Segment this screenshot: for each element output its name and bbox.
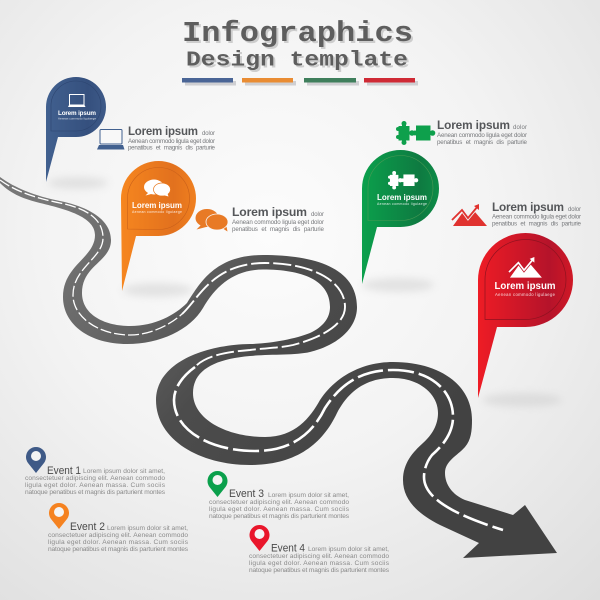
text block 2: dolor [311,212,324,218]
winding road with arrow [0,177,557,558]
event 1: Event 1 [47,465,81,477]
event 4: natoque penatibus et magnis dis parturient montes [249,567,390,574]
event 2: natoque penatibus et magnis dis parturient montes [48,546,189,553]
panel: orange pin: Aenean commodo ligulaege [132,210,182,214]
icon: green location marker [208,471,227,497]
event 1: natoque penatibus et magnis dis parturient montes [25,489,166,496]
panel: blue pin: Aenean commodo ligulaege [58,116,96,120]
icon: puzzle pieces [396,121,435,145]
event 2: Lorem ipsum dolor sit amet, [107,525,188,532]
panel: green pin: Lorem ipsum [377,193,427,202]
event 3 [208,471,350,520]
text block 1: dolor [202,131,215,137]
event 4: Event 4 [271,542,305,554]
text block 2 [232,205,325,233]
text block 4: Lorem ipsum [492,200,564,214]
event 1: consectetuer adipiscing elit. Aenean commodo [25,475,165,482]
event 1 [25,447,166,496]
panel: orange pin: Lorem ipsum [132,201,182,210]
text block 2: Lorem ipsum [232,205,307,219]
title: Infographics [182,17,413,50]
text block 3: Lorem ipsum [437,118,510,132]
event 1: ligula eget dolor. Aenean massa. Cum sociis [25,482,166,489]
panel: red pin: Aenean commodo ligulaege [495,292,556,297]
text block 3 [437,118,528,146]
event 1: Lorem ipsum dolor sit amet, [83,468,165,475]
panel: red pin [478,233,573,407]
event 4 [249,525,390,574]
text block 4: Aenean commodo ligula eget dolor [492,214,581,220]
panel: blue pin [46,77,108,189]
panel: green pin: Aenean commodo ligulaege [377,202,427,206]
title: Design template [186,48,408,72]
event 2: ligula eget dolor. Aenean massa. Cum sociis [48,539,189,546]
icon: orange location marker [49,503,69,529]
icon: laptop [97,130,124,150]
event 2: consectetuer adipiscing elit. Aenean commodo [48,532,188,539]
panel: green pin [362,150,439,292]
event 3: consectetuer adipiscing elit. Aenean commodo [209,499,349,506]
event 4: consectetuer adipiscing elit. Aenean commodo [249,553,389,560]
icon: mountain chart in pin [509,257,542,278]
title colour bars [182,78,418,86]
icon: blue location marker [26,447,46,473]
text block 3: dolor [513,125,527,131]
icon: chat bubbles [196,209,228,232]
title [182,17,415,74]
text block 4: dolor [568,207,581,213]
event 2: Event 2 [70,521,105,533]
text block 4 [492,200,582,228]
text block 1 [128,126,216,152]
title: Infographics [184,19,415,52]
text block 3: Aenean commodo ligula eget dolor [437,132,527,139]
panel: orange pin [121,161,196,297]
text block 2: penatibus et magnis dis parturie [232,226,325,233]
icon: red location marker [250,525,270,551]
panel: blue pin: Lorem ipsum [58,110,96,117]
icon: chat bubbles in pin [144,180,170,196]
event 2 [48,503,189,553]
event 4: Lorem ipsum dolor sit amet, [308,546,389,553]
event 4: ligula eget dolor. Aenean massa. Cum sociis [249,560,390,567]
event 3: Lorem ipsum dolor sit amet, [268,492,349,499]
event 3: Event 3 [229,488,264,500]
text block 4: penatibus et magnis dis parturie [492,220,582,228]
text block 3: penatibus et magnis dis parturie [437,139,528,146]
text block 1: penatibus et magnis dis parturie [128,144,216,152]
event 3: natoque penatibus et magnis dis parturient montes [209,513,350,520]
title: Design template [188,50,410,74]
icon: mountain chart [452,204,487,226]
text block 1: Lorem ipsum [128,126,198,138]
icon: puzzle in pin [388,171,418,189]
panel: red pin: Lorem ipsum [494,281,556,292]
text block 1: Aenean commodo ligula eget dolor [128,138,215,145]
icon: laptop in pin [68,94,86,107]
event 3: ligula eget dolor. Aenean massa. Cum sociis [209,506,350,513]
text block 2: Aenean commodo ligula eget dolor [232,219,324,226]
